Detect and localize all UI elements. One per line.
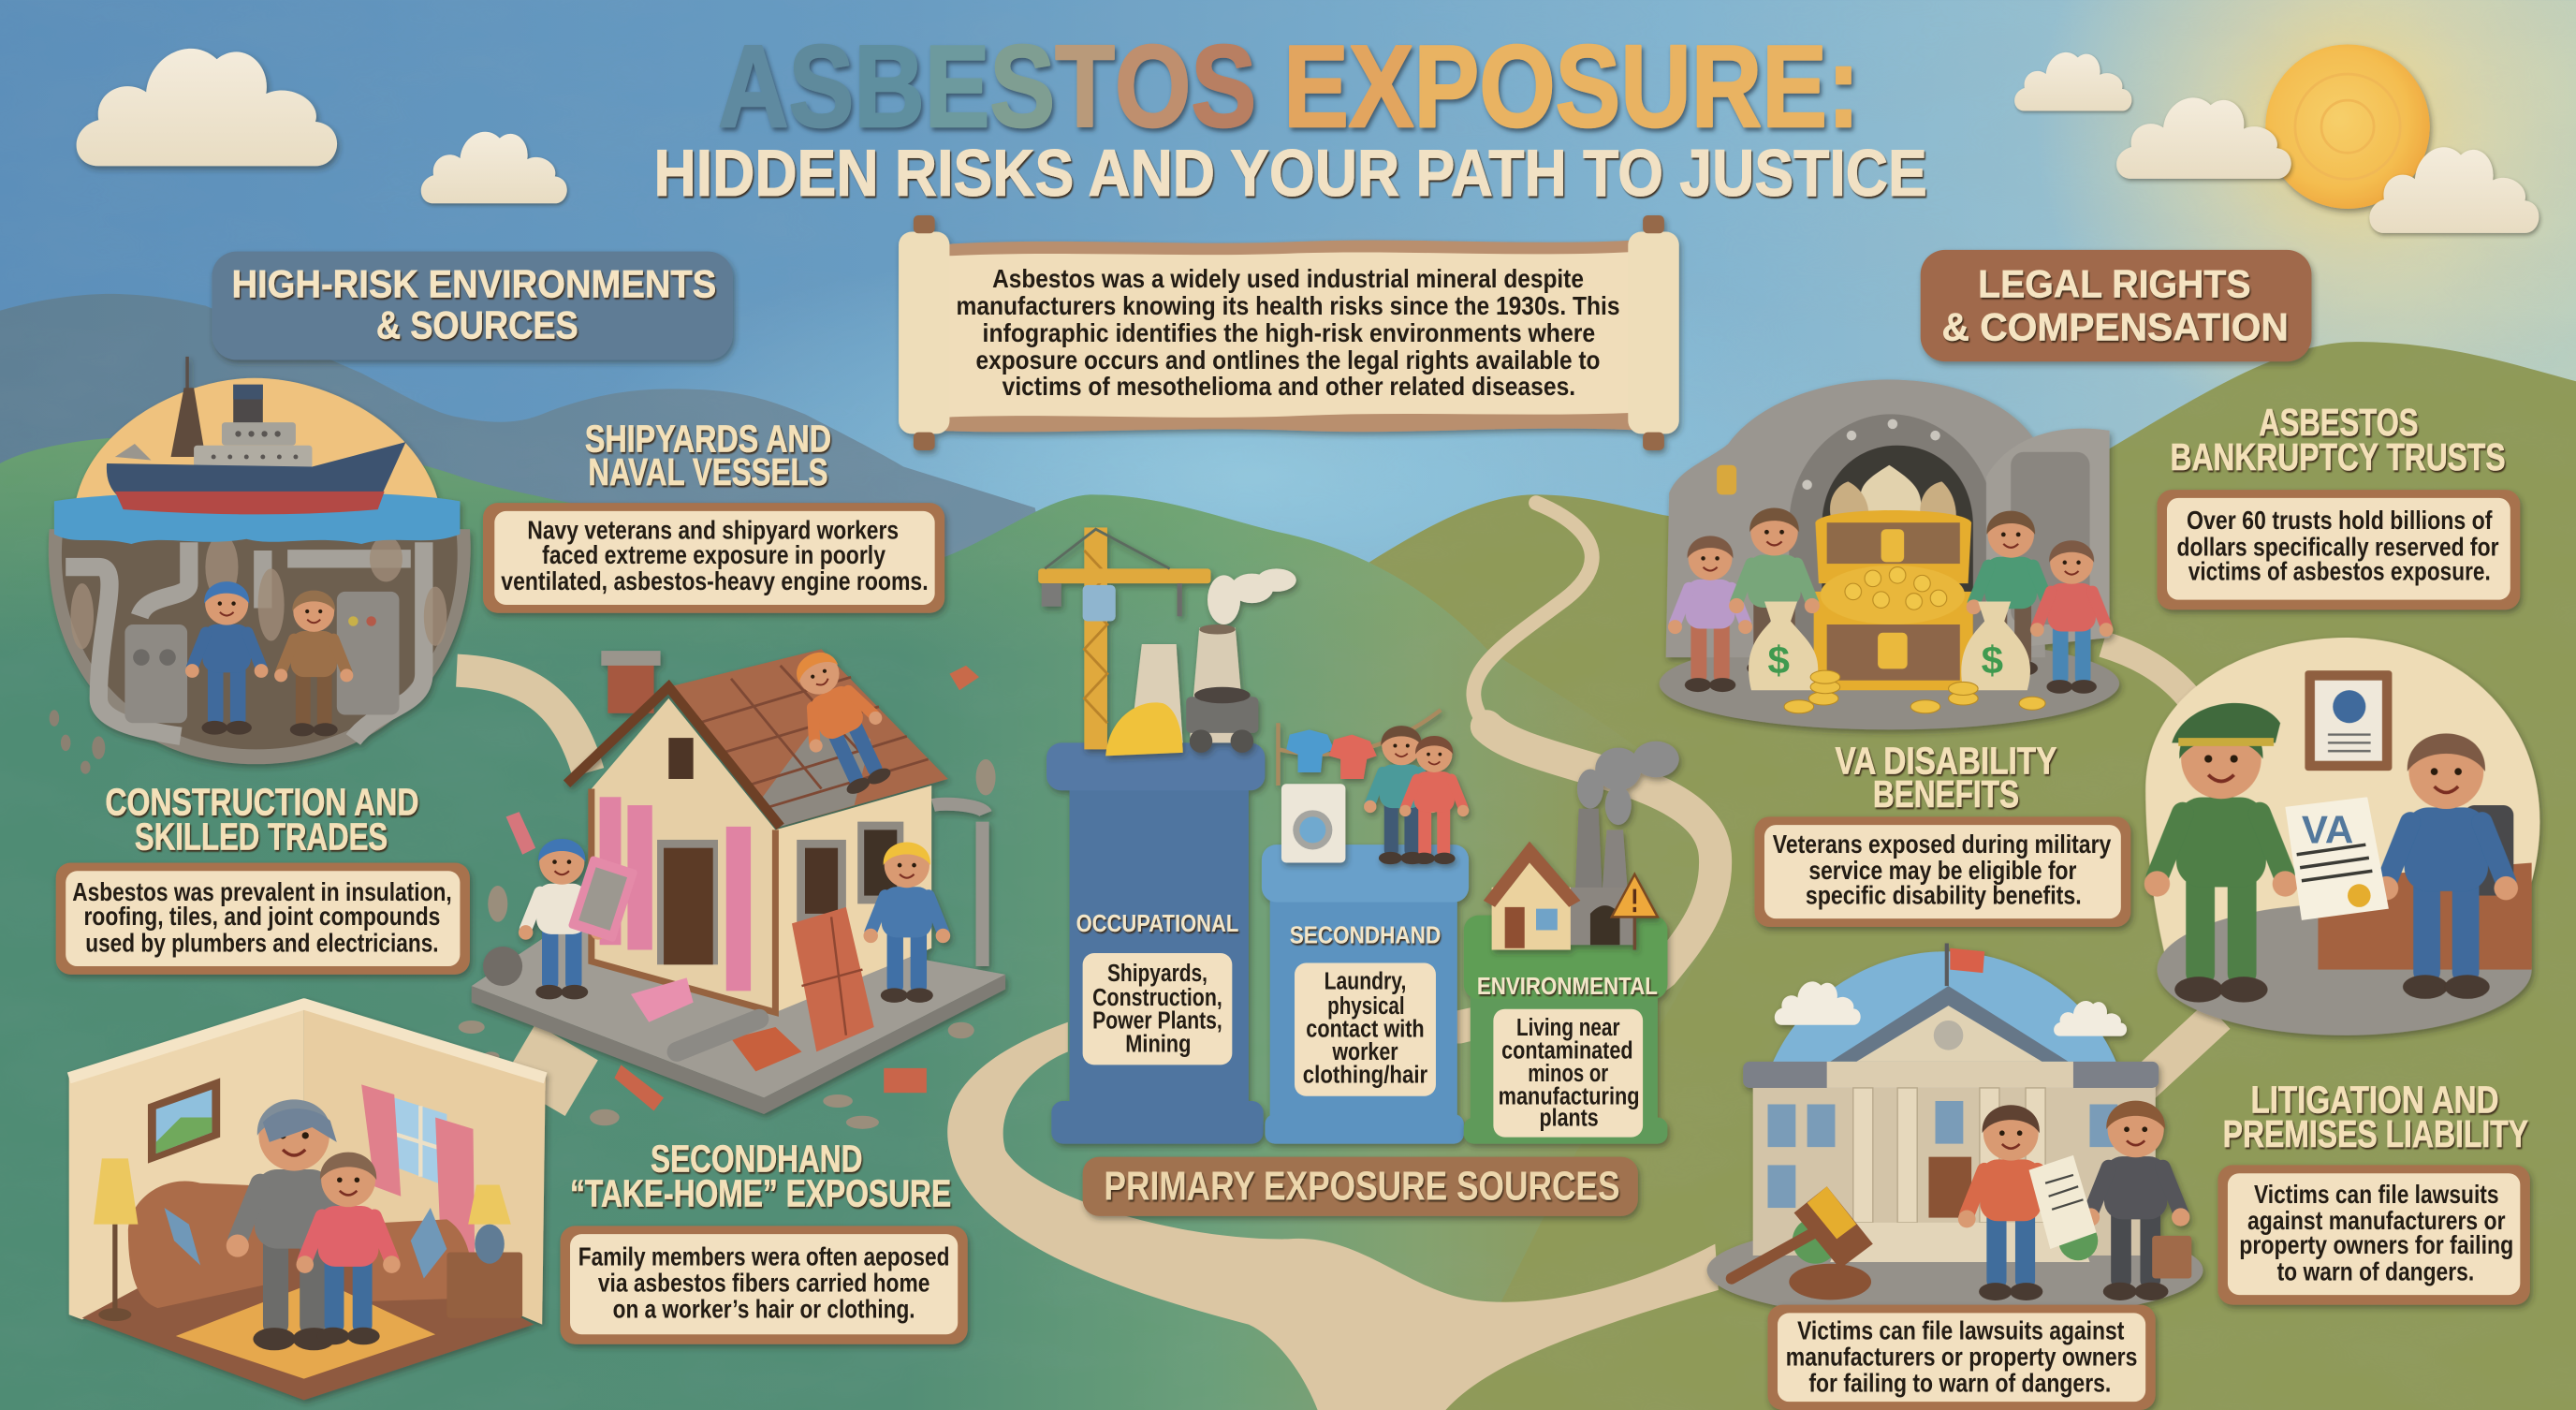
heading and text: secondhand: SECONDHAND (651, 1137, 862, 1180)
VA document: VA (2302, 807, 2353, 851)
heading and text: bankruptcy trusts: ASBESTOS (2259, 401, 2419, 444)
subtitle: HIDDEN RISKS AND YOUR PATH TO JUSTICE (654, 136, 1927, 210)
heading and text: litigation (2217, 1078, 2530, 1305)
pillar: environmental (1464, 916, 1667, 1144)
cloud 3 (2014, 52, 2131, 111)
heading and text: shipyards: faced extreme exposure in poorly (542, 540, 886, 569)
worker on window (863, 843, 950, 1003)
intro scroll: manufacturers knowing its health risks since the 1930s. This (956, 291, 1620, 320)
worker with insulation (519, 839, 606, 999)
illustration: house under construction (472, 639, 1005, 1114)
heading and text: VA disability: Veterans exposed during military (1773, 830, 2112, 859)
pillar: occupational: OCCUPATIONAL (1076, 909, 1238, 937)
worker in overalls (185, 581, 268, 735)
heading and text: shipyards: SHIPYARDS AND (585, 418, 831, 461)
heading and text: VA disability: service may be eligible for (1808, 856, 2076, 885)
illustration: VA benefits scene (2144, 638, 2539, 1035)
person: woman left (1668, 536, 1752, 692)
pillar toppers: clothesline, washer, couple (1278, 710, 1469, 864)
heading and text: bankruptcy trusts: Over 60 trusts hold billions of (2187, 506, 2493, 535)
pillar: occupational (1046, 742, 1265, 1144)
pillar: secondhand: SECONDHAND (1290, 920, 1441, 948)
ground light overlay (0, 435, 1486, 986)
pillar toppers: factory, house, warning sign (1484, 742, 1679, 950)
heading and text: construction: CONSTRUCTION AND (105, 781, 419, 824)
soldier (2144, 718, 2298, 1003)
illustration: ship and engine room (49, 357, 471, 764)
pillar: secondhand: clothing/hair (1303, 1061, 1427, 1089)
cloud 1 (77, 49, 337, 166)
heading and text: litigation: LITIGATION AND (2250, 1078, 2499, 1121)
person: woman right (2030, 540, 2113, 694)
heading and text: bankruptcy trusts (2157, 401, 2520, 610)
person: man left (1729, 508, 1820, 676)
heading and text: secondhand: on a worker’s hair or clothing. (613, 1295, 915, 1324)
pillar: occupational: Power Plants, (1092, 1006, 1222, 1035)
text box: bottom lawsuits callout (1767, 1305, 2156, 1410)
section banner: high-risk environments: & SOURCES (376, 303, 578, 347)
text box: bottom lawsuits callout: for failing to warn of dangers. (1808, 1369, 2111, 1398)
text box: bottom lawsuits callout: manufacturers or property owners (1786, 1343, 2137, 1372)
heading and text: construction (56, 781, 470, 975)
pillar: occupational: Shipyards, (1107, 959, 1208, 987)
official in suit (2375, 733, 2518, 999)
pillar: environmental: plants (1540, 1103, 1599, 1131)
heading and text: litigation: property owners for failing (2239, 1230, 2513, 1259)
heading and text: construction: SKILLED TRADES (135, 815, 388, 858)
intro scroll: infographic identifies the high-risk environments where (983, 318, 1595, 347)
sun (2265, 44, 2430, 209)
pillar: secondhand: Laundry, (1325, 967, 1406, 995)
pillar: occupational: Construction, (1092, 983, 1222, 1011)
heading and text: shipyards: Navy veterans and shipyard workers (527, 516, 899, 545)
heading and text: shipyards (483, 418, 944, 613)
heading and text: VA disability: specific disability benefits. (1806, 880, 2082, 909)
heading and text: secondhand: Family members wera often aeposed (578, 1241, 949, 1270)
money bags: $ (1982, 639, 2003, 683)
illustration: courthouse with lawyer, client and gavel (1707, 943, 2203, 1321)
heading and text: VA disability (1754, 740, 2130, 927)
gavel (1732, 1186, 1873, 1300)
heading and text: secondhand: via asbestos fibers carried home (598, 1269, 929, 1298)
heading and text: VA disability: VA DISABILITY (1835, 740, 2056, 783)
pillar: environmental: manufacturing (1499, 1081, 1640, 1109)
heading and text: bankruptcy trusts: dollars specifically reserved for (2177, 532, 2499, 561)
lawyer (2082, 1101, 2189, 1300)
heading and text: secondhand: “TAKE-HOME” EXPOSURE (570, 1171, 951, 1214)
heading and text: litigation: against manufacturers or (2247, 1206, 2506, 1235)
heading and text: VA disability: BENEFITS (1873, 772, 2019, 815)
pillar: environmental: contaminated (1501, 1035, 1633, 1064)
pillar: environmental: Living near (1516, 1013, 1620, 1041)
heading and text: secondhand (560, 1137, 968, 1344)
mountains (0, 294, 1051, 592)
debris near ship (50, 710, 105, 774)
heading and text: litigation: to warn of dangers. (2277, 1256, 2474, 1285)
heading and text: litigation: Victims can file lawsuits (2254, 1180, 2499, 1209)
intro scroll: Asbestos was a widely used industrial mineral despite (992, 264, 1584, 293)
heading and text: bankruptcy trusts: victims of asbestos exposure. (2188, 557, 2491, 586)
pillar: occupational: Mining (1125, 1029, 1191, 1057)
olive hills right (1281, 342, 2576, 1410)
roofer (774, 639, 907, 803)
path: large lower road (947, 1022, 1719, 1410)
intro scroll (899, 215, 1679, 450)
pillar: secondhand: contact with (1306, 1015, 1425, 1043)
banner: primary exposure sources: PRIMARY EXPOSURE SOURCES (1104, 1163, 1620, 1209)
father hugging child (227, 1099, 362, 1350)
path: connectors (457, 644, 2217, 1097)
money bags (1749, 601, 2030, 690)
pillar: secondhand: physical (1327, 991, 1405, 1020)
pillar toppers: crane, towers, hat, cart (1038, 527, 1296, 756)
section banner: high-risk environments: HIGH-RISK ENVIRONMENTS (231, 262, 716, 306)
section banner: legal rights: & COMPENSATION (1942, 304, 2289, 348)
pillar: environmental: ENVIRONMENTAL (1477, 972, 1658, 1000)
worker in brown suit (274, 591, 353, 736)
heading and text: shipyards: ventilated, asbestos-heavy engine rooms. (501, 566, 929, 595)
cloud 2 (421, 132, 567, 203)
green hills and ground (0, 435, 1727, 1410)
pillar: environmental: minos or (1528, 1059, 1608, 1087)
pillar: secondhand (1262, 845, 1469, 1144)
person: man right (1967, 511, 2056, 676)
illustration: living room (69, 1004, 546, 1400)
heading and text: construction: used by plumbers and electricians. (85, 928, 439, 957)
client (1958, 1105, 2064, 1300)
text box: bottom lawsuits callout: Victims can file lawsuits against (1797, 1315, 2124, 1344)
illustration: vault with treasure and family (1660, 379, 2119, 729)
flying debris (459, 666, 996, 1129)
VA document (2285, 797, 2389, 920)
intro scroll: exposure occurs and ontlines the legal rights available to (976, 345, 1600, 375)
child (296, 1153, 401, 1344)
cloud 4 (2116, 97, 2291, 179)
heading and text: shipyards: NAVAL VESSELS (588, 450, 828, 493)
section banner: legal rights (1921, 250, 2311, 361)
pillar: secondhand: worker (1332, 1037, 1398, 1065)
cloud 5 (2369, 147, 2539, 233)
title: ASBESTOS EXPOSURE: (718, 22, 1860, 152)
money bags: $ (1767, 639, 1790, 683)
heading and text: construction: Asbestos was prevalent in insulation, (72, 877, 452, 906)
path: winding upper road (1459, 503, 1716, 1027)
section banner: high-risk environments (212, 252, 733, 360)
heading and text: construction: roofing, tiles, and joint compounds (84, 902, 440, 931)
banner: primary exposure sources (1083, 1157, 1638, 1216)
intro scroll: victims of mesothelioma and other related diseases. (1003, 372, 1575, 401)
section banner: legal rights: LEGAL RIGHTS (1978, 262, 2250, 306)
